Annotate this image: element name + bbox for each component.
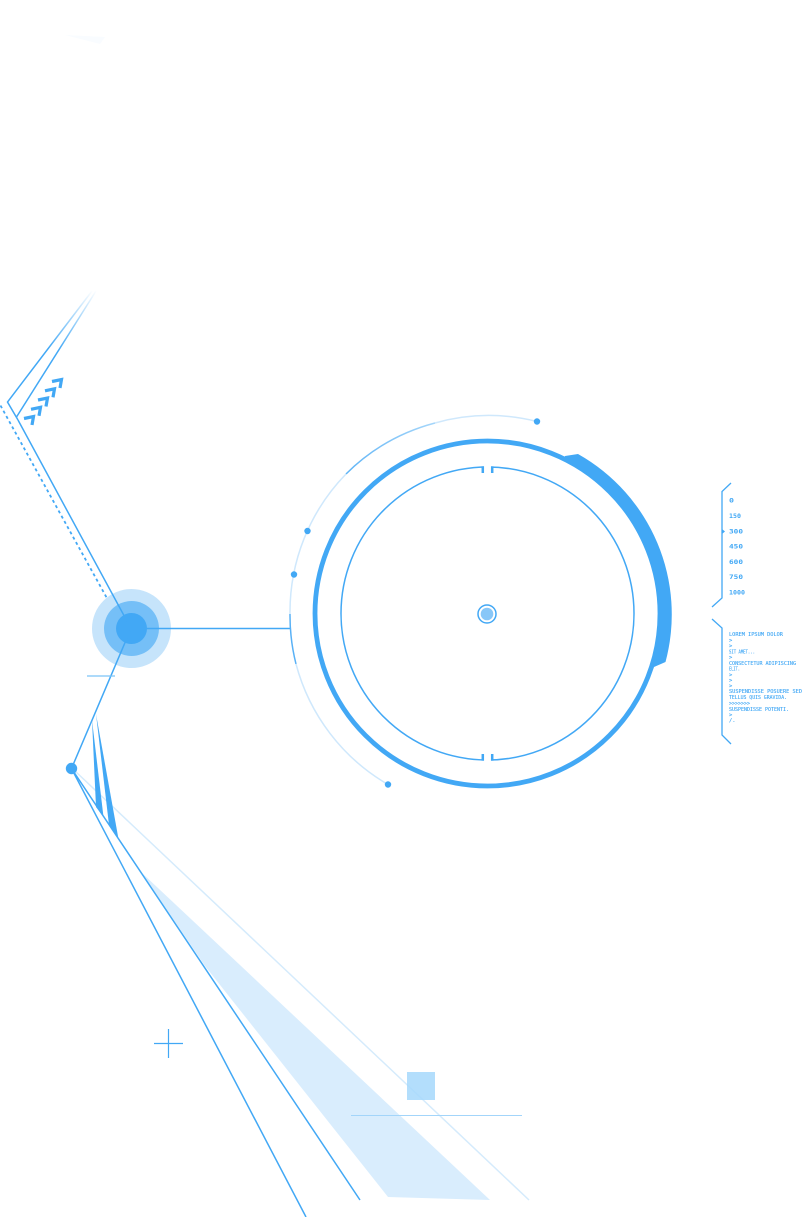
scale pointer bbox=[722, 529, 725, 534]
center dot bbox=[478, 605, 496, 623]
main ring bbox=[315, 441, 660, 786]
text block: LOREM IPSUM DOLOR bbox=[729, 632, 784, 638]
square marker bbox=[407, 1072, 435, 1100]
short dash bbox=[87, 675, 115, 677]
inner ring with ticks bbox=[341, 464, 634, 763]
text block: > bbox=[729, 655, 733, 661]
faint top wedge bbox=[65, 35, 105, 44]
text block: SUSPENDISSE POTENTI. bbox=[729, 707, 789, 713]
scale labels: 1000 bbox=[729, 590, 745, 596]
text block bbox=[729, 632, 802, 724]
text panel bbox=[712, 619, 802, 744]
text block: > bbox=[729, 644, 733, 650]
text block: > bbox=[729, 712, 733, 718]
scale labels bbox=[729, 498, 745, 596]
scale labels: 600 bbox=[729, 559, 743, 566]
text block: /. bbox=[729, 718, 736, 724]
text block: > bbox=[729, 672, 733, 678]
spikes bbox=[92, 714, 118, 839]
text block: > bbox=[729, 678, 733, 684]
horizontal base line bbox=[351, 1114, 522, 1116]
scale labels: 0 bbox=[729, 498, 735, 504]
scale labels: 450 bbox=[729, 544, 743, 550]
upper angled lines bbox=[8, 291, 96, 420]
text block: SUSPENDISSE POSUERE SED bbox=[729, 689, 802, 695]
text block: > bbox=[729, 684, 733, 690]
plus icon bbox=[154, 1029, 183, 1058]
scale labels: 750 bbox=[729, 574, 743, 581]
large light beam bbox=[142, 873, 490, 1200]
text block: ELIT. bbox=[729, 666, 740, 672]
chevron arrows bbox=[24, 380, 62, 425]
text block: CONSECTETUR ADIPISCING bbox=[729, 661, 796, 667]
text block: > bbox=[729, 638, 733, 644]
text block: TELLUS QUIS GRAVIDA. bbox=[729, 695, 787, 701]
scale bracket bbox=[712, 483, 731, 607]
thin light diagonal line bbox=[75, 771, 529, 1200]
outer arc with dots bbox=[290, 416, 540, 788]
text bracket bbox=[712, 619, 731, 744]
text block: SIT AMET... bbox=[729, 650, 755, 656]
scale labels: 300 bbox=[729, 528, 743, 536]
target node bbox=[92, 589, 171, 668]
dotted diagonal line bbox=[0, 406, 119, 620]
scale labels: 150 bbox=[729, 513, 741, 520]
connector lines bbox=[18, 420, 360, 1217]
node dot bbox=[66, 763, 77, 774]
text block: >>>>>>> bbox=[729, 701, 751, 707]
scale panel bbox=[712, 483, 745, 607]
thick arc segment bbox=[564, 454, 672, 667]
